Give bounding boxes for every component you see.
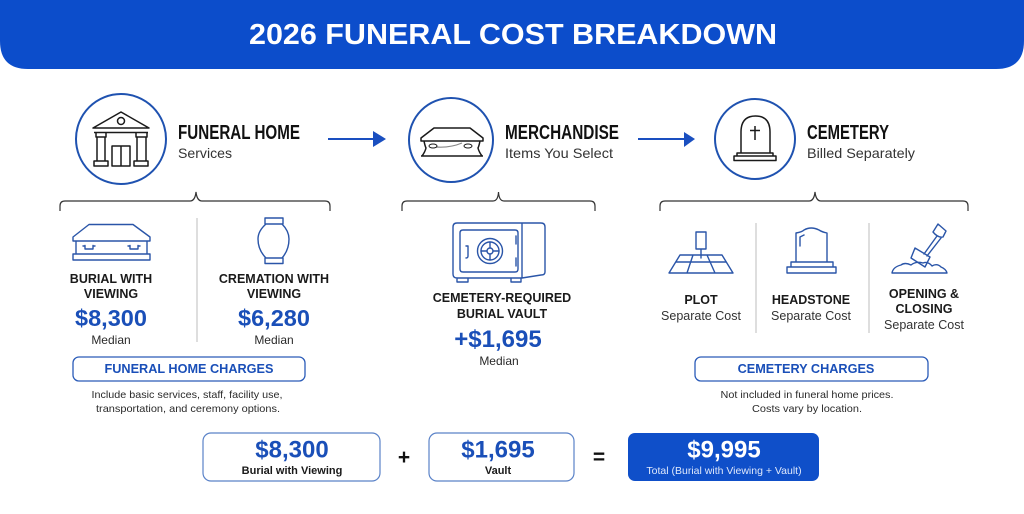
plus sign: +: [398, 446, 410, 469]
note: funeral home charges: Include basic services, staff, facility use,: [92, 389, 282, 401]
icon: headstone: [787, 228, 836, 273]
bracket: cemetery: [660, 192, 968, 211]
icon: shovel: [892, 224, 947, 273]
column: plot: [661, 232, 741, 323]
column: burial vault: BURIAL VAULT: [457, 307, 547, 321]
icon: safe: [453, 223, 545, 282]
column: cremation with viewing: CREMATION WITH: [219, 272, 329, 286]
equation box: total: $9,995: [687, 436, 761, 464]
icon: urn: [258, 218, 289, 264]
column: burial vault: [433, 223, 571, 368]
column: burial with viewing: Median: [91, 333, 131, 347]
label: cemetery charges: CEMETERY CHARGES: [738, 362, 874, 376]
title: 2026 FUNERAL COST BREAKDOWN: [249, 19, 777, 51]
heading: merchandise: [505, 122, 619, 161]
equation box: vault: [429, 433, 574, 481]
column: opening and closing: Separate Cost: [884, 318, 964, 332]
column: plot: PLOT: [684, 293, 718, 307]
column: burial vault: Median: [479, 354, 519, 368]
equation box: vault: $1,695: [461, 436, 535, 464]
equation box: burial: Burial with Viewing: [242, 465, 342, 477]
icon: funeral home building: [76, 94, 166, 184]
column: burial with viewing: [70, 224, 152, 347]
icon: casket: [73, 224, 150, 260]
column: headstone: Separate Cost: [771, 309, 851, 323]
column: opening and closing: OPENING &: [889, 287, 959, 301]
column: cremation with viewing: [219, 218, 329, 347]
icon: casket merchandise: [409, 98, 493, 182]
equation box: burial: $8,300: [255, 436, 329, 464]
heading: funeral home: [178, 122, 300, 161]
column: burial with viewing: BURIAL WITH: [70, 272, 152, 286]
equation box: vault: Vault: [485, 465, 511, 477]
header banner: [0, 0, 1024, 69]
arrow 1: [328, 131, 386, 147]
column: plot: Separate Cost: [661, 309, 741, 323]
heading: merchandise: MERCHANDISE: [505, 122, 619, 144]
heading: funeral home: Services: [178, 145, 232, 161]
arrow 2: [638, 132, 695, 147]
note: funeral home charges: [92, 389, 282, 415]
equation box: burial: [203, 433, 380, 481]
note: cemetery charges: Costs vary by location.: [752, 403, 862, 415]
note: cemetery charges: [720, 389, 894, 415]
icon: plot: [669, 232, 733, 273]
equation box: total: Total (Burial with Viewing + Vault): [646, 465, 802, 477]
column: burial with viewing: $8,300: [75, 305, 147, 331]
divider lines: [197, 218, 869, 342]
column: opening and closing: CLOSING: [896, 302, 952, 316]
label: funeral home charges: [73, 357, 305, 381]
heading: merchandise: Items You Select: [505, 145, 613, 161]
bracket: funeral home: [60, 192, 330, 211]
column: burial vault: CEMETERY-REQUIRED: [433, 291, 571, 305]
column: headstone: [771, 228, 851, 323]
heading: funeral home: FUNERAL HOME: [178, 122, 300, 144]
equation box: total: [628, 433, 819, 481]
column: burial vault: +$1,695: [454, 326, 542, 353]
note: cemetery charges: Not included in funeral home prices.: [720, 389, 894, 401]
equals sign: =: [593, 446, 605, 469]
icon: headstone with cross: [715, 99, 795, 179]
label: funeral home charges: FUNERAL HOME CHARGES: [105, 362, 273, 376]
column: cremation with viewing: VIEWING: [247, 287, 301, 301]
bracket: merchandise: [402, 192, 595, 211]
column: burial with viewing: VIEWING: [84, 287, 138, 301]
heading: cemetery: CEMETERY: [807, 122, 889, 144]
heading: cemetery: Billed Separately: [807, 145, 915, 161]
label: cemetery charges: [695, 357, 928, 381]
column: headstone: HEADSTONE: [772, 293, 850, 307]
column: cremation with viewing: Median: [254, 333, 294, 347]
column: cremation with viewing: $6,280: [238, 305, 310, 331]
column: opening and closing: [884, 224, 964, 332]
note: funeral home charges: transportation, and ceremony options.: [96, 403, 280, 415]
heading: cemetery: [807, 122, 915, 161]
